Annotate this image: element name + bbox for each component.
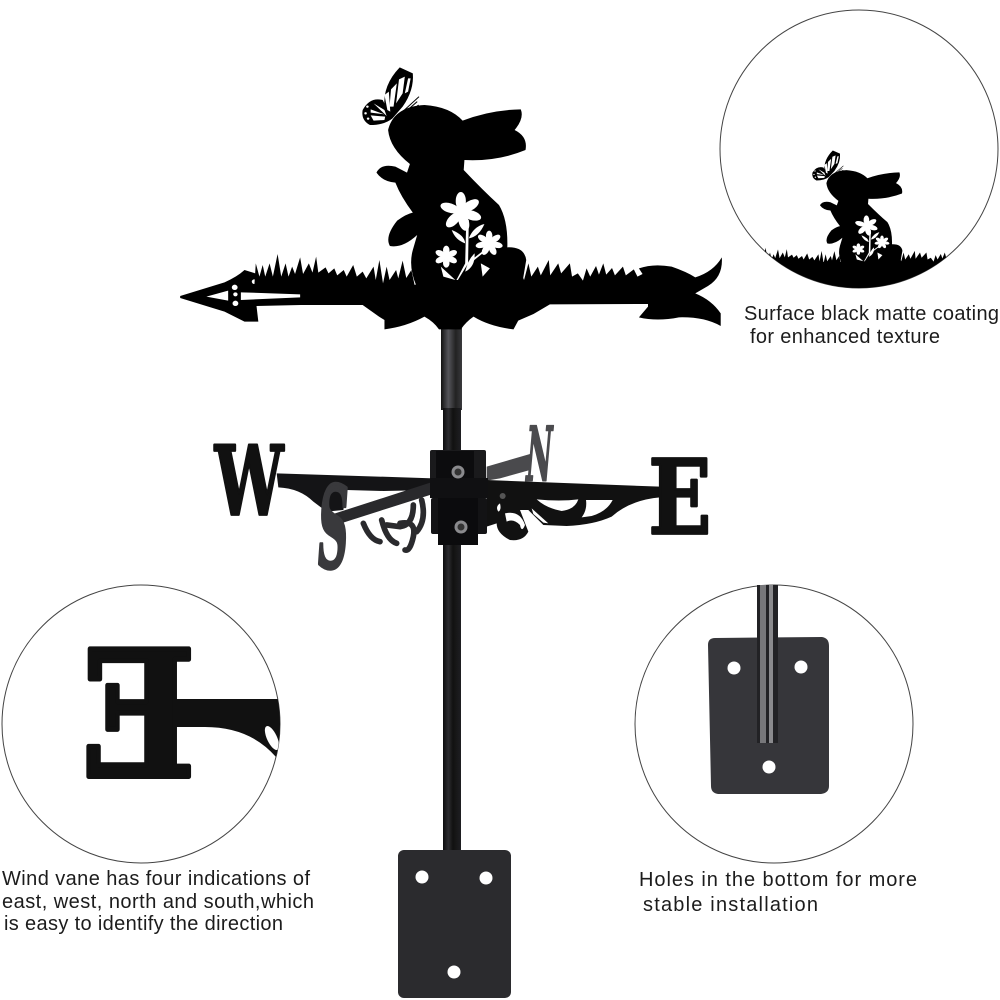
- caption: direction: is easy to identify the direction: [4, 913, 283, 935]
- enlarged letter E: E: [81, 612, 196, 818]
- north arm: [487, 454, 530, 481]
- grass: [254, 254, 414, 286]
- east arm: [487, 480, 660, 540]
- south letter: S: [313, 462, 353, 595]
- caption: mounting holes: Holes in the bottom for more: [639, 869, 917, 891]
- rabbit silhouette: [376, 105, 526, 286]
- west arm: [277, 473, 433, 512]
- caption: surface coating: for enhanced texture: [750, 326, 940, 348]
- butterfly: [362, 67, 419, 125]
- flowers: [434, 192, 503, 280]
- shaft: [172, 699, 282, 758]
- south scroll: [363, 500, 423, 550]
- north letter: N: [522, 412, 556, 499]
- mounting plate: [398, 850, 511, 998]
- west letter: W: [214, 425, 285, 538]
- pole: [441, 328, 462, 850]
- small rabbit: [764, 150, 946, 288]
- arrow slit: [206, 279, 300, 306]
- rabbit with butterfly and flowers: [254, 67, 643, 286]
- caption: direction: east, west, north and south,which: [2, 891, 314, 913]
- south arm: [325, 482, 435, 527]
- detail circle: mounting holes: [635, 585, 913, 863]
- caption: direction: Wind vane has four indications of: [2, 868, 310, 890]
- arrow and tail bar: [180, 257, 722, 329]
- caption: surface coating: Surface black matte coating: [744, 303, 999, 325]
- caption: mounting holes: stable installation: [643, 894, 818, 916]
- compass arms: [214, 412, 711, 595]
- caption: direction: [2, 868, 314, 935]
- bracket with screws: [430, 450, 488, 545]
- caption: surface coating: [744, 303, 999, 348]
- enlarged pole: [757, 585, 778, 743]
- east letter: E: [648, 438, 711, 559]
- caption: mounting holes: [639, 869, 917, 916]
- detail circle: direction letter: [2, 585, 282, 863]
- detail circle: surface coating: [720, 10, 1000, 292]
- enlarged plate: [708, 637, 829, 794]
- wind vane head: rabbit on arrow: [180, 67, 722, 329]
